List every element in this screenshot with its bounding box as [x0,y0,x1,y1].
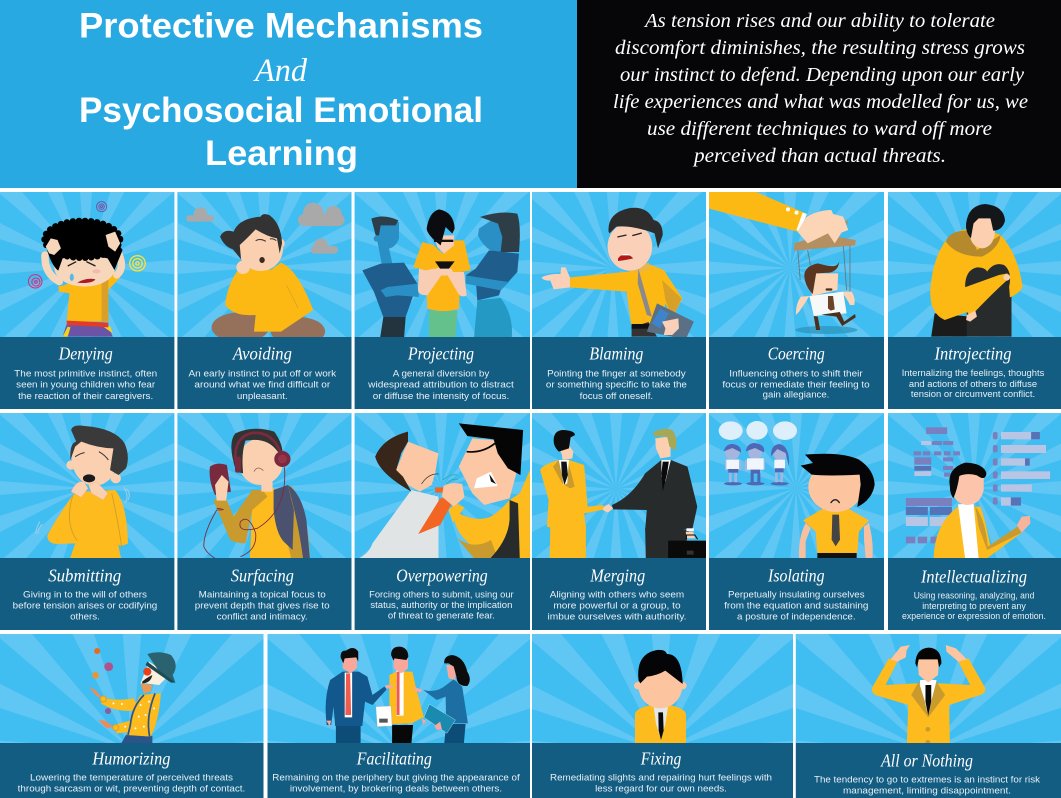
caption: Surfacing: Maintaining a topical focus to [199,590,326,601]
caption: Overpowering [355,558,530,630]
caption: Merging [532,558,706,630]
illustration: man isolated from chatting group [719,421,875,558]
illustration: frightened man with hands at mouth [36,425,129,558]
caption: Projecting: A general diversion by [393,368,489,380]
illustration: businessman with raised arms [872,645,985,745]
header: intro paragraph panel: discomfort diminishes, the resulting stress grows [615,37,1025,59]
header: title panel: Psychosocial Emotional [79,91,483,130]
caption: Introjecting: Internalizing the feelings, thoughts [902,368,1044,379]
header: intro paragraph panel: perceived than actual threats. [692,145,946,167]
caption: Humorizing [0,743,264,798]
caption: Surfacing: conflict and intimacy. [217,612,308,623]
caption: Merging: more powerful or a group, to [553,601,681,612]
panel: Projecting [354,192,530,409]
caption: Projecting: widespread attribution to distract [367,380,514,390]
caption: Intellectualizing: interpreting to prevent any [922,601,1026,612]
header: title panel: And [253,53,307,89]
caption: Facilitating: involvement, by brokering deals between others. [290,784,502,795]
caption: Coercing: focus or remediate their feeling to [722,380,870,390]
caption: Surfacing: Surfacing [231,566,294,586]
panel: Isolating [709,413,884,630]
caption: Introjecting [888,337,1061,409]
header: intro paragraph panel: our instinct to defend. Depending upon our early [620,64,1024,86]
panel: Merging [532,413,706,630]
illustration: aggressor grabbing a man by the tie [359,423,530,558]
caption: Intellectualizing: Using reasoning, analyzing, and [914,591,1034,602]
caption: Isolating [709,558,884,630]
panel: Blaming [532,192,706,409]
caption: Coercing: Coercing [768,344,825,364]
caption: All or Nothing: The tendency to go to extremes is an instinct for risk [814,775,1040,786]
panel: Introjecting [888,192,1061,409]
caption: Submitting [0,558,174,630]
illustration: man with charts and diagrams [906,427,1050,558]
caption: Denying [0,337,174,409]
caption: Blaming: Blaming [589,344,644,364]
caption: Facilitating: Remaining on the periphery but giving the appearance of [272,773,520,784]
caption: Merging: imbue ourselves with authority. [548,612,686,623]
caption: Merging: Merging [589,566,645,586]
illustration: hooded figure hugging [930,204,1023,337]
illustration: man pointing a finger [542,208,694,347]
caption: Projecting: Projecting [407,344,474,364]
panel: All or Nothing [796,634,1061,798]
caption: Projecting [355,337,530,409]
illustration: broker between two colleagues [326,647,470,743]
panel: Humorizing [0,634,264,798]
caption: Blaming: or something specific to take the [546,380,687,390]
header: title panel [0,0,577,188]
header: title panel: Protective Mechanisms [79,6,483,46]
caption: Denying: seen in young children who fear [16,380,156,390]
caption: Denying: the reaction of their caregivers. [18,391,153,402]
caption: Introjecting: tension or circumvent conflict. [911,389,1035,400]
caption: Coercing: Influencing others to shift their [729,368,864,380]
caption: Isolating: Perpetually insulating ourselves [728,590,865,601]
illustration: hand controlling a puppet [708,192,857,334]
caption: All or Nothing: management, limiting disappointment. [843,786,1011,797]
header: title panel: Learning [205,134,358,173]
caption: Avoiding: around what we find difficult or [194,380,331,390]
caption: Introjecting: and actions of others to diffuse [909,379,1037,390]
caption: Blaming: Pointing the finger at somebody [547,368,686,380]
caption: Avoiding [177,337,352,409]
panel: Fixing [532,634,793,798]
caption: Overpowering: Overpowering [396,566,488,586]
caption: Overpowering: Forcing others to submit, using our [369,590,514,601]
caption: Projecting: or diffuse the intensity of focus. [373,391,509,402]
caption: Facilitating [268,743,530,798]
caption: Coercing [709,337,884,409]
caption: Humorizing: Humorizing [91,748,171,768]
caption: Submitting: Submitting [48,566,121,586]
caption: Avoiding: unpleasant. [237,391,288,402]
caption: Denying: The most primitive instinct, often [14,368,157,380]
illustration: three people, two in blue [362,209,520,339]
illustration: seated person with clouds [186,203,345,346]
caption: Avoiding: Avoiding [232,344,292,364]
caption: Blaming [532,337,706,409]
panel: Intellectualizing [888,413,1061,630]
caption: Intellectualizing [888,558,1061,630]
panel: Coercing [709,192,884,409]
illustration: person with headphones and phone [204,429,310,558]
caption: Fixing: less regard for our own needs. [595,784,727,795]
illustration: two men in suits shaking hands [540,429,707,558]
caption: Intellectualizing: experience or expression of emotion. [902,611,1046,622]
caption: Merging: Aligning with others who seem [550,590,684,601]
header: intro paragraph panel: As tension rises and our ability to tolerate [643,10,995,32]
caption: Overpowering: of threat to generate fear. [388,611,495,622]
caption: Introjecting: Introjecting [934,344,1012,364]
caption: Surfacing [177,558,352,630]
header: intro paragraph panel: use different techniques to ward off more [647,118,992,140]
caption: Submitting: others. [70,612,100,623]
caption: Fixing [532,743,793,798]
caption: Avoiding: An early instinct to put off or work [188,368,336,380]
caption: Overpowering: status, authority or the implication [370,600,512,611]
caption: Submitting: before tension arises or codifying [13,601,157,612]
caption: Isolating: from the equation and sustaining [724,601,868,612]
panel: Avoiding [177,192,352,409]
caption: Humorizing: Lowering the temperature of perceived threats [30,773,233,784]
panel: Submitting [0,413,174,630]
panel: Denying [0,192,174,409]
caption: Isolating: a posture of independence. [737,612,856,623]
caption: All or Nothing: All or Nothing [880,751,973,771]
illustration: distressed child [28,202,145,337]
caption: Facilitating: Facilitating [356,748,432,768]
caption: Blaming: focus off oneself. [580,391,653,402]
caption: Isolating: Isolating [767,566,825,586]
header: intro paragraph panel [577,0,1061,188]
header: intro paragraph panel: life experiences and what was modelled for us, we [613,91,1028,113]
caption: Surfacing: prevent depth that gives rise to [195,601,330,612]
caption: Fixing: Remediating slights and repairing hurt feelings with [550,773,772,784]
caption: Intellectualizing: Intellectualizing [920,566,1027,586]
caption: Humorizing: through sarcasm or wit, preventing depth of contact. [18,784,245,795]
caption: Coercing: gain allegiance. [763,390,829,400]
panel: Facilitating [268,634,530,798]
caption: All or Nothing [796,743,1061,798]
panel: Surfacing [177,413,352,630]
panel: Overpowering [354,413,530,630]
illustration: businessman from shoulders up [634,650,687,744]
caption: Fixing: Fixing [640,748,682,768]
caption: Denying: Denying [58,344,113,364]
illustration: juggling clown [89,648,176,743]
caption: Submitting: Giving in to the will of others [23,590,147,601]
